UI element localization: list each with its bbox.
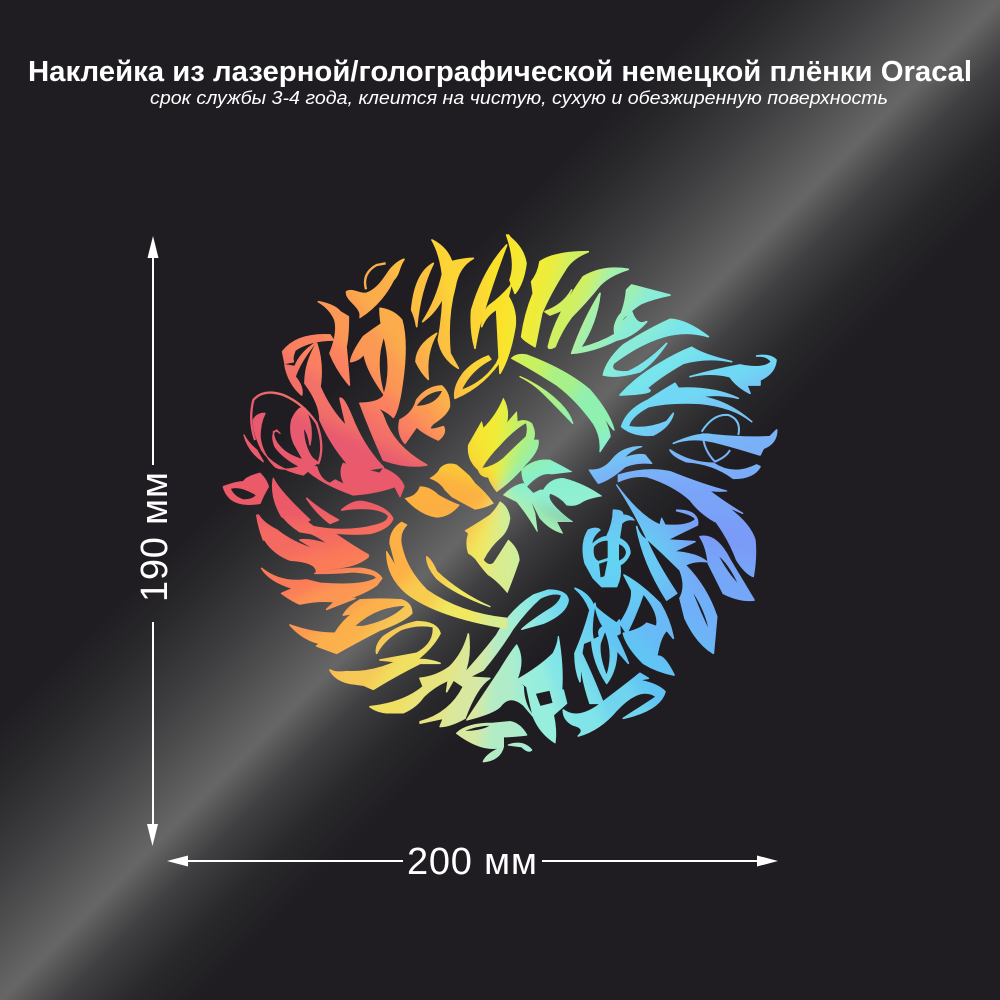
inner arcs and centre pinwheel [387,355,614,628]
height dimension arrow [134,236,176,846]
lettering: bottom ribbon and tall letters [420,590,568,762]
lettering: right side bird and long blades [583,447,756,587]
height dimension arrow: 190 мм [134,472,176,602]
subtitle: срок службы 3-4 года, клеится на чистую, сухую и обезжиренную поверхность [150,87,888,108]
pinwheel [405,398,602,593]
title: Наклейка из лазерной/голографической немецкой плёнки Oracal [28,56,972,88]
holographic lettering artwork [223,235,777,762]
width dimension arrow: 200 мм [407,841,537,883]
lettering: bottom-left segment [258,497,469,713]
lettering: top-left segment [283,235,520,472]
arc: upper right [512,355,614,452]
width dimension arrow [167,841,778,883]
arc: lower left [387,522,507,628]
lettering: left side loops and sweep [223,393,404,540]
lettering: bottom-right segment [563,511,754,736]
lettering: top-right segment [497,235,777,478]
